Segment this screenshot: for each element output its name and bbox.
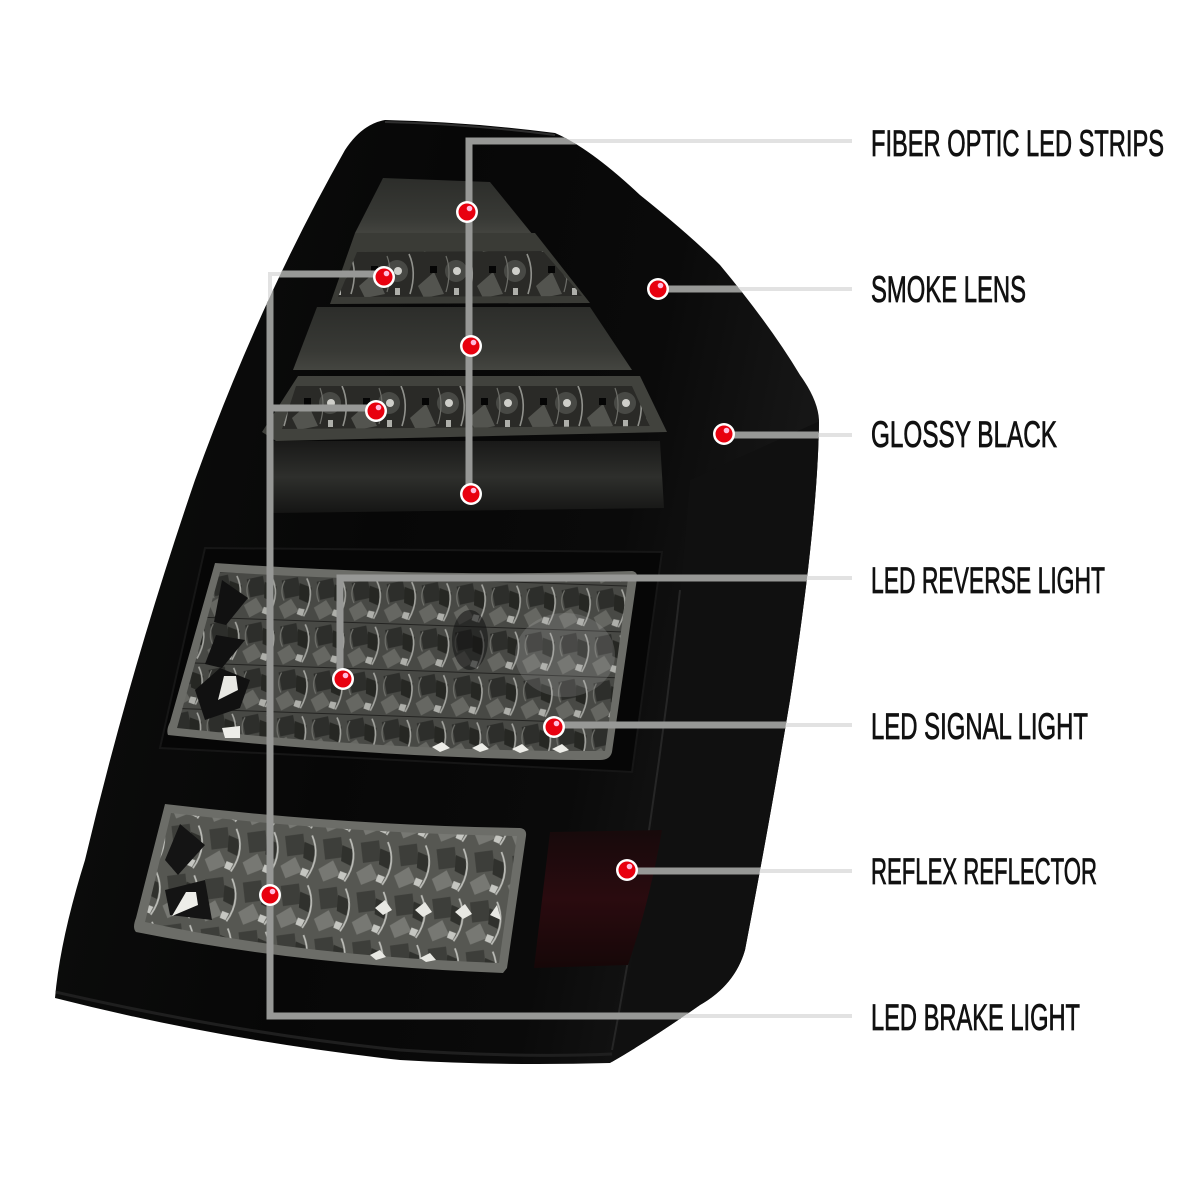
smoke panel: top xyxy=(355,178,533,235)
leader: fiber optic LED strips xyxy=(469,141,852,494)
upper LED strip xyxy=(330,233,590,304)
leader: glossy black xyxy=(724,433,852,437)
bright reflections at right xyxy=(515,613,615,697)
label: LED signal light: LED SIGNAL LIGHT xyxy=(871,706,1088,747)
large facets at left xyxy=(195,580,250,720)
leader: LED brake light xyxy=(270,274,852,1016)
brake LED lens xyxy=(134,804,526,973)
dot: brake light lower strip xyxy=(365,400,387,422)
bright diamonds along lens xyxy=(370,900,501,962)
dot: reverse light xyxy=(332,668,354,690)
dot: signal light xyxy=(543,716,565,738)
labels xyxy=(871,123,1164,1038)
marker dots xyxy=(259,201,735,906)
dot: glossy black xyxy=(713,423,735,445)
dot: reflex reflector xyxy=(616,859,638,881)
large facets at left xyxy=(165,824,212,920)
label: glossy black: GLOSSY BLACK xyxy=(871,414,1057,455)
bright diamonds along lower row xyxy=(222,726,569,753)
leader: smoke lens xyxy=(658,287,852,291)
glossy black body xyxy=(55,120,819,1064)
dot: fiber optic 2 xyxy=(460,335,482,357)
dark reflection in centre xyxy=(452,610,488,670)
label: smoke lens: SMOKE LENS xyxy=(871,269,1026,310)
leader: LED reverse light xyxy=(340,578,852,679)
recessed lamp bezel xyxy=(160,548,662,772)
dot: smoke lens xyxy=(647,278,669,300)
leader: LED signal light xyxy=(554,723,852,727)
reverse and signal LED lens xyxy=(167,563,637,760)
dot: fiber optic 3 xyxy=(460,483,482,505)
tail light housing xyxy=(55,120,822,1070)
smoke panel: bottom xyxy=(272,441,664,513)
lower LED strip xyxy=(262,376,667,441)
outer side panel xyxy=(55,122,822,1070)
dot: fiber optic 1 xyxy=(456,201,478,223)
label: LED brake light: LED BRAKE LIGHT xyxy=(871,997,1080,1038)
leader: reflex reflector xyxy=(627,869,852,873)
dot: brake light upper strip xyxy=(373,266,395,288)
smoke panel: middle xyxy=(293,307,632,370)
dot: brake light lens xyxy=(259,884,281,906)
red reflex reflector xyxy=(534,830,662,968)
